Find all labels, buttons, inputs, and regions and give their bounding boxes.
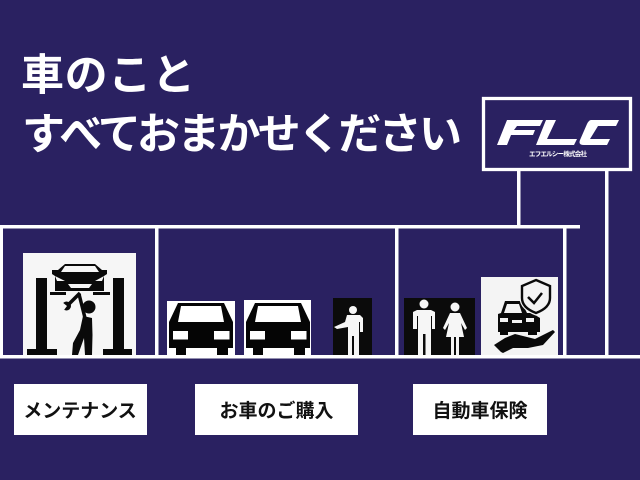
label: car insurance: 自動車保険 xyxy=(432,400,528,422)
panel: car 1 xyxy=(167,301,235,355)
panel: car 2 xyxy=(244,300,311,355)
building frame xyxy=(0,225,640,358)
wrench and arm xyxy=(60,293,85,318)
panel: insurance icon xyxy=(481,277,558,355)
panel: restroom figures xyxy=(404,298,475,355)
label: maintenance: メンテナンス xyxy=(23,401,137,422)
panel: maintenance icon xyxy=(23,253,136,355)
sign: FLC logo xyxy=(484,98,630,356)
label: car purchase xyxy=(195,384,358,435)
label: car purchase: お車のご購入 xyxy=(219,399,334,422)
label: car insurance xyxy=(413,384,547,435)
sign: FLC logo: エフエルシー株式会社 xyxy=(529,149,588,158)
label: maintenance xyxy=(14,384,147,435)
title: すべておまかせください xyxy=(22,111,462,159)
panel: staff figure xyxy=(333,298,372,355)
title: 車のこと xyxy=(21,52,195,100)
title xyxy=(21,52,462,159)
